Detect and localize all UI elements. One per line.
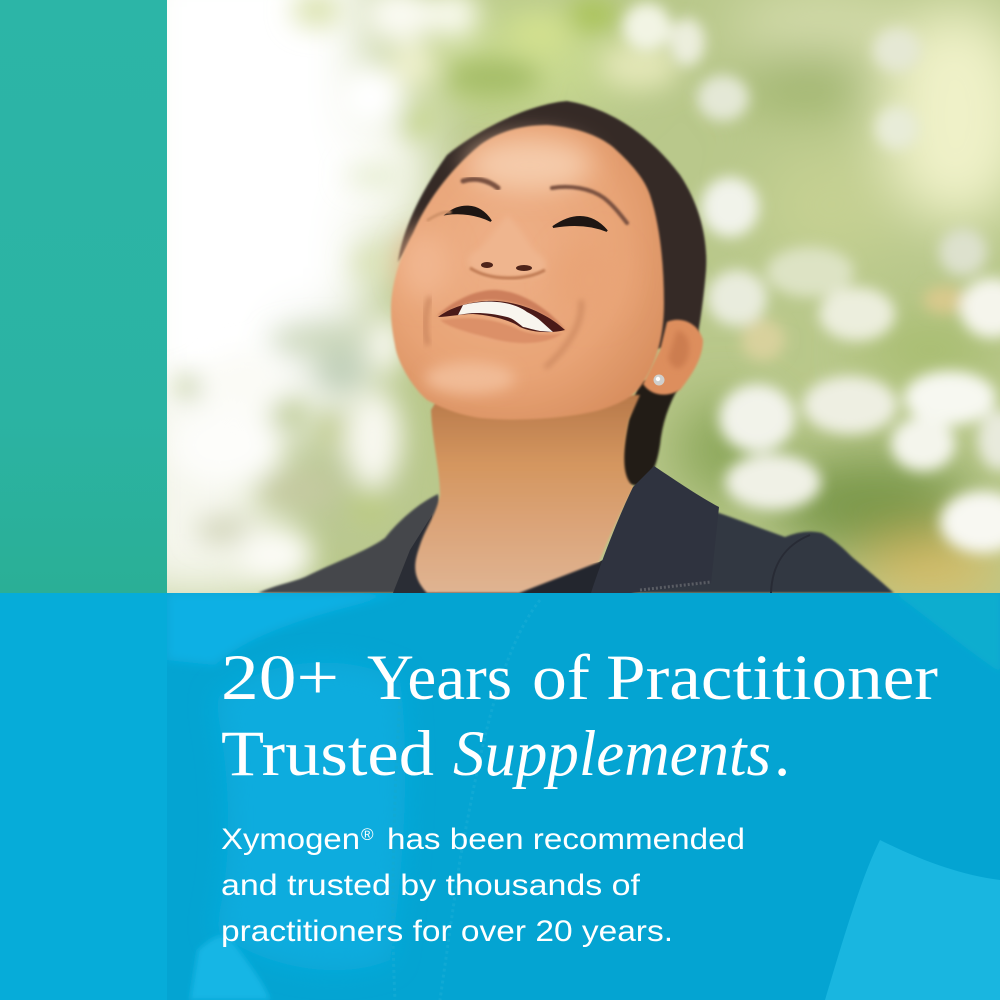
heading: Years <box>367 642 512 714</box>
back hair <box>398 101 706 350</box>
teal side panel <box>0 0 167 593</box>
ponytail <box>621 380 680 486</box>
earring <box>654 374 664 386</box>
heading: of <box>532 642 590 714</box>
jacket <box>258 494 894 593</box>
heading: Trusted <box>221 718 434 790</box>
body text: Xymogen <box>221 823 360 856</box>
body text: practitioners for over 20 years. <box>221 915 673 948</box>
heading: 20+ <box>221 642 339 714</box>
heading: Supplements <box>453 718 771 790</box>
photo: smiling woman against blurred trees <box>120 0 1000 602</box>
background foliage <box>120 0 1000 602</box>
body text: and trusted by thousands of <box>221 869 641 902</box>
heading: . <box>774 718 790 790</box>
body text <box>221 823 745 948</box>
heading: Practitioner <box>606 642 938 714</box>
body text: ® <box>361 825 374 844</box>
body text: has been recommended <box>387 823 745 856</box>
eyebrows <box>463 179 627 223</box>
ear <box>643 320 703 395</box>
bokeh highlights <box>623 3 1000 553</box>
neck <box>415 395 640 593</box>
face <box>391 125 664 420</box>
blue panel <box>0 593 1000 1000</box>
mouth <box>436 290 567 343</box>
sleeve seam <box>771 535 810 593</box>
inner ear <box>668 330 689 368</box>
heading <box>221 642 938 790</box>
eyes <box>428 207 607 231</box>
jacket lapel <box>591 466 719 593</box>
facial highlights and shadow <box>399 139 626 394</box>
lapel zip <box>640 582 711 590</box>
nose <box>468 215 546 278</box>
